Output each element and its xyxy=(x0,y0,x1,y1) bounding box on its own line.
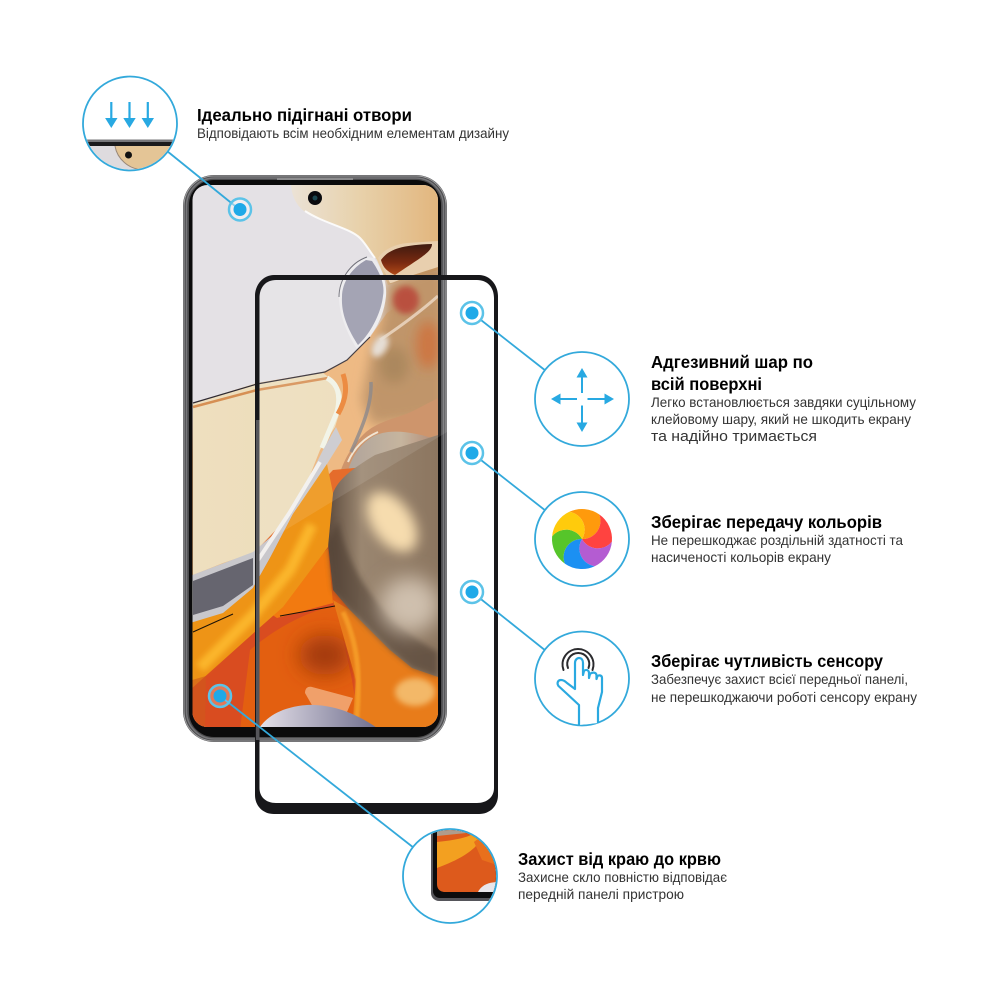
text: adhesive layer: клейовому шару, який не шкодить екрану xyxy=(651,412,911,427)
dome xyxy=(341,398,438,470)
text: colour preservation: Зберігає передачу кольорів xyxy=(651,512,882,532)
text: edge protection: Захисне скло повністю відповідає xyxy=(518,870,727,885)
marker: edge xyxy=(209,685,231,707)
text: edge protection: Захист від краю до крвю xyxy=(518,849,721,869)
marker: adhesive xyxy=(461,302,483,324)
lower base oranges xyxy=(190,460,438,730)
text: edge protection xyxy=(518,849,727,902)
text: perfectly fitted cutouts xyxy=(197,105,509,141)
text: colour preservation: насиченості кольорів екрану xyxy=(651,550,831,565)
text: adhesive layer: всій поверхні xyxy=(651,374,762,394)
callout lines xyxy=(167,151,546,848)
text: edge protection: передній панелі пристрою xyxy=(518,887,684,902)
marker: colours xyxy=(461,442,483,464)
phone screen wallpaper xyxy=(190,183,445,730)
translucent streaks xyxy=(380,296,438,340)
text: colour preservation xyxy=(651,512,903,565)
icon: cutouts xyxy=(82,76,178,172)
icon: phone edge xyxy=(402,828,498,924)
text: adhesive layer: та надійно тримається xyxy=(651,429,817,445)
icon: colour wheel xyxy=(535,492,629,586)
grey-brown blob xyxy=(328,435,438,677)
grey band xyxy=(190,427,342,626)
text: perfectly fitted cutouts: Відповідають всім необхідним елементам дизайну xyxy=(197,126,509,141)
brown mid region xyxy=(362,260,445,425)
marker: top of screen xyxy=(229,198,251,220)
bump and tongue xyxy=(305,687,353,712)
tempered glass outline xyxy=(255,275,498,814)
text: touch sensitivity: Забезпечує захист всієї передньої панелі, xyxy=(651,672,908,687)
glass sheen xyxy=(259,280,447,546)
marker: touch xyxy=(461,581,483,603)
text: touch sensitivity xyxy=(651,651,917,705)
text: adhesive layer: Легко встановлюється завдяки суцільному xyxy=(651,395,916,410)
text: touch sensitivity: не перешкоджаючи роботі сенсору екрану xyxy=(651,690,917,705)
orange band xyxy=(190,464,333,690)
text: touch sensitivity: Зберігає чутливість сенсору xyxy=(651,651,883,671)
lower peach base xyxy=(190,280,438,730)
camera xyxy=(308,191,322,205)
right flame xyxy=(333,600,438,730)
text: adhesive layer xyxy=(651,352,916,445)
text: perfectly fitted cutouts: Ідеально підігнані отвори xyxy=(197,105,412,125)
cream xyxy=(193,373,342,575)
phone body xyxy=(183,175,447,742)
icon: touch hand xyxy=(535,632,629,726)
text: adhesive layer: Адгезивний шар по xyxy=(651,352,813,372)
grey sphere xyxy=(339,257,386,349)
phone xyxy=(183,175,447,742)
dark blob xyxy=(378,241,438,283)
icon: four-way arrows xyxy=(535,352,629,446)
text: colour preservation: Не перешкоджає роздільній здатності та xyxy=(651,533,903,548)
